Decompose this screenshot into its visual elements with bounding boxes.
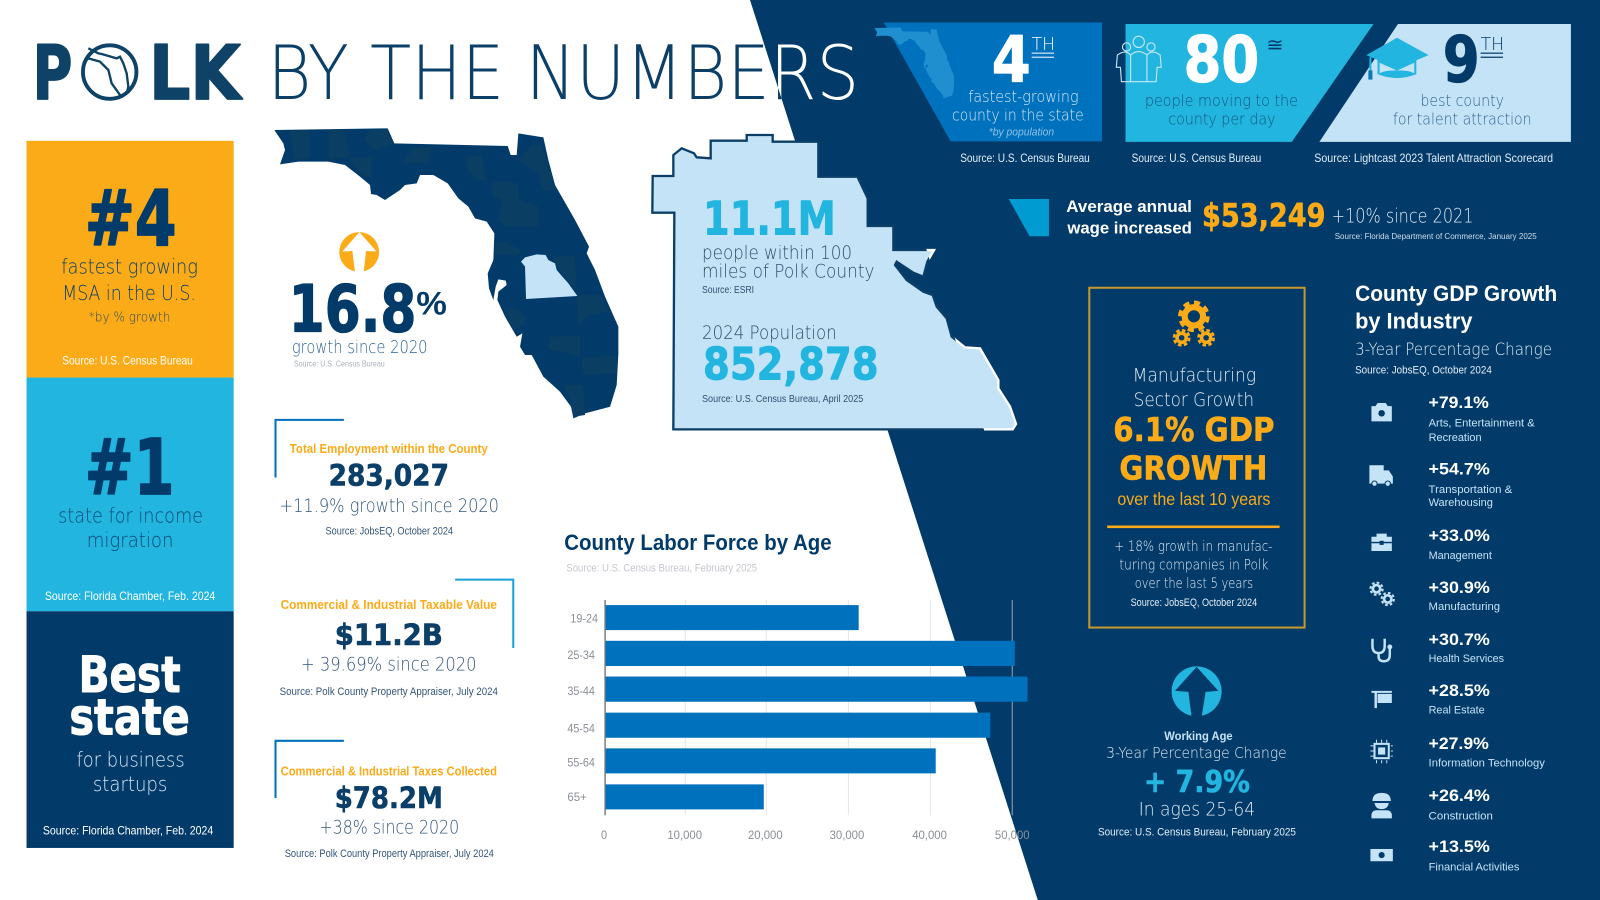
icon: cyan up arrow	[1172, 666, 1222, 717]
heading: county GDP growth by industry: County GDP Growth	[1355, 281, 1557, 306]
row: health services: Health Services	[1429, 653, 1504, 665]
row: real estate: Real Estate	[1429, 704, 1485, 716]
panel: manufacturing sector growth: over the last 10 years	[1117, 489, 1271, 509]
stat: working age change: 3-Year Percentage Change	[1106, 744, 1287, 762]
stat: working age change: + 7.9%	[1144, 765, 1250, 800]
icon: gears	[1174, 303, 1214, 345]
stat: commercial and industrial taxable value: + 39.69% since 2020	[301, 654, 477, 675]
panel: #4 fastest growing MSA: #4	[85, 175, 177, 264]
stat: average annual wage: $53,249	[1202, 199, 1326, 235]
panel: best state for business startups: state	[69, 689, 190, 747]
row: health services	[1372, 631, 1504, 665]
heading: county labor force by age	[564, 530, 832, 574]
icon: people group	[1116, 36, 1161, 82]
title	[33, 30, 859, 117]
stat: commercial and industrial taxes collected: +38% since 2020	[319, 818, 459, 839]
panel: #1 state for income migration: #1	[85, 424, 174, 513]
panel: 80 people moving per day	[1116, 23, 1373, 142]
panel: 4th fastest-growing county: 4	[992, 23, 1031, 97]
panel: Polk County shape: people within 100	[702, 243, 852, 264]
panel: #1 state for income migration	[27, 378, 234, 611]
panel: 9th best county for talent attraction: TH	[1481, 35, 1504, 55]
panel: best state for business startups	[27, 611, 234, 848]
panel: 9th best county for talent attraction: for talent attraction	[1393, 109, 1532, 128]
row: construction: Construction	[1429, 810, 1493, 822]
stat: 16.8% growth since 2020: Source: U.S. Census Bureau	[294, 358, 385, 368]
panel: Polk County shape: 2024 Population	[702, 323, 837, 344]
panel: #1 state for income migration: state for income	[58, 503, 203, 527]
stat: commercial and industrial taxes collected: $78.2M	[335, 781, 443, 815]
panel: #4 fastest growing MSA: fastest growing	[61, 254, 198, 278]
heading: county labor force by age: Source: U.S. Census Bureau, February 2025	[566, 562, 757, 574]
stat: average annual wage: Source: Florida Department of Commerce, January 2025	[1335, 231, 1537, 241]
bar chart: labor force by age: 35-44	[567, 684, 595, 698]
bar chart: labor force by age	[567, 600, 1030, 842]
panel: Polk County shape: Source: ESRI	[702, 285, 754, 296]
panel: 9th best county for talent attraction: best county	[1420, 91, 1504, 110]
icon: graduation cap	[1366, 38, 1429, 80]
panel: manufacturing sector growth: 6.1% GDP	[1113, 411, 1274, 449]
panel: #4 fastest growing MSA: Source: U.S. Census Bureau	[62, 353, 193, 367]
panel: best state for business startups: Source: Florida Chamber, Feb. 2024	[43, 824, 213, 838]
stat: total employment: Source: JobsEQ, October 2024	[326, 526, 453, 538]
title: LK	[149, 30, 243, 117]
row: manufacturing: Manufacturing	[1429, 601, 1500, 613]
stat: total employment: Total Employment within the County	[290, 441, 489, 456]
panel: 4th fastest-growing county: *by population	[989, 127, 1054, 139]
icon: Florida silhouette	[875, 28, 954, 99]
heading: county GDP growth by industry: 3-Year Percentage Change	[1355, 339, 1552, 359]
row: information technology	[1370, 735, 1545, 769]
row: management	[1371, 527, 1493, 562]
bar chart: labor force by age: 45-54	[567, 722, 595, 736]
panel: #1 state for income migration: Source: Florida Chamber, Feb. 2024	[45, 589, 215, 603]
panel: manufacturing sector growth	[1089, 288, 1305, 628]
background: navy diagonal panel	[750, 0, 1600, 900]
bar chart: labor force by age: 65+	[567, 790, 587, 804]
row: financial activities	[1370, 838, 1520, 873]
stat: commercial and industrial taxes collected	[276, 741, 497, 860]
panel: #4 fastest growing MSA: MSA in the U.S.	[62, 281, 196, 305]
panel: manufacturing sector growth: + 18% growth in manufac-	[1114, 539, 1272, 555]
bar chart: labor force by age: 55-64	[567, 755, 595, 769]
bar chart: labor force by age: 20,000	[748, 828, 783, 842]
panel: 9th best county for talent attraction	[1319, 23, 1571, 142]
panel: Polk County shape: miles of Polk County	[702, 262, 874, 283]
bar chart: labor force by age: 50,000	[995, 828, 1030, 842]
row: information technology: Information Technology	[1429, 757, 1545, 769]
panel: manufacturing sector growth: turing companies in Polk	[1119, 557, 1268, 573]
stat: average annual wage: wage increased	[1066, 219, 1192, 238]
icon: orange up arrow	[339, 232, 379, 272]
panel: Polk County shape	[652, 135, 1016, 429]
panel: 80 people moving per day: county per day	[1168, 109, 1276, 128]
panel: manufacturing sector growth: Sector Growth	[1134, 389, 1254, 411]
panel: manufacturing sector growth: GROWTH	[1119, 450, 1267, 488]
panel: #4 fastest growing MSA: *by % growth	[89, 310, 170, 325]
panel: manufacturing sector growth: Manufacturing	[1133, 365, 1256, 387]
row: arts, entertainment and recreation: Recreation	[1429, 432, 1482, 444]
stat: commercial and industrial taxable value: Commercial & Industrial Taxable Value	[281, 597, 497, 612]
panel: manufacturing sector growth: Source: JobsEQ, October 2024	[1131, 597, 1257, 609]
stat: average annual wage: Average annual	[1066, 197, 1192, 216]
row: construction: +26.4%	[1429, 787, 1490, 805]
stat: working age change	[1098, 666, 1296, 839]
panel: 80 people moving per day: people moving to the	[1145, 91, 1298, 110]
sources for top tiles	[960, 152, 1553, 165]
stat: working age change: Source: U.S. Census Bureau, February 2025	[1098, 827, 1296, 839]
row: information technology: +27.9%	[1429, 735, 1489, 753]
stat: average annual wage	[1009, 197, 1537, 241]
bar chart: labor force by age: 10,000	[667, 828, 702, 842]
panel: 80 people moving per day: 80	[1184, 23, 1259, 97]
stat: 16.8% growth since 2020: %	[416, 284, 447, 321]
panel: 4th fastest-growing county	[875, 22, 1102, 141]
list: GDP growth by industry	[1369, 394, 1545, 873]
panel: 80 people moving per day: ≅	[1266, 35, 1284, 56]
stat: 16.8% growth since 2020: 16.8	[289, 272, 416, 348]
panel: Polk County shape: 852,878	[703, 338, 879, 391]
row: arts, entertainment and recreation	[1371, 394, 1535, 444]
heading: county GDP growth by industry: by Industry	[1355, 309, 1473, 334]
row: management: Management	[1429, 550, 1493, 562]
sources for top tiles: Source: U.S. Census Bureau	[1132, 152, 1261, 165]
row: manufacturing: +30.9%	[1429, 579, 1490, 597]
stat: total employment: 283,027	[329, 459, 449, 493]
icon: wage wedge	[1009, 199, 1049, 236]
row: transportation and warehousing: +54.7%	[1429, 460, 1490, 478]
stat: commercial and industrial taxable value: Source: Polk County Property Appraiser, July 2024	[280, 686, 498, 698]
bar chart: labor force by age: 0	[601, 828, 607, 842]
stat: total employment	[276, 420, 499, 538]
sources for top tiles: Source: Lightcast 2023 Talent Attraction Scorecard	[1314, 152, 1553, 165]
row: financial activities: +13.5%	[1429, 838, 1490, 856]
row: arts, entertainment and recreation: +79.1%	[1429, 394, 1489, 412]
row: transportation and warehousing: Warehousing	[1429, 497, 1493, 509]
heading: county GDP growth by industry	[1355, 281, 1557, 376]
map: Florida with Polk County highlighted	[274, 128, 618, 418]
bar chart: labor force by age: 40,000	[912, 828, 947, 842]
row: financial activities: Financial Activities	[1429, 861, 1520, 873]
icon: globe with Florida in title	[83, 45, 136, 99]
sources for top tiles: Source: U.S. Census Bureau	[960, 152, 1090, 165]
stat: commercial and industrial taxable value	[280, 580, 513, 698]
panel: Polk County shape: Source: U.S. Census Bureau, April 2025	[702, 394, 864, 405]
row: management: +33.0%	[1429, 527, 1490, 545]
stat: commercial and industrial taxes collected: Commercial & Industrial Taxes Collected	[281, 764, 497, 779]
panel: best state for business startups: for business	[77, 747, 185, 771]
row: arts, entertainment and recreation: Arts, Entertainment &	[1429, 418, 1535, 430]
panel: #1 state for income migration: migration	[87, 528, 173, 552]
stat: 16.8% growth since 2020: growth since 2020	[292, 337, 428, 358]
row: manufacturing	[1370, 579, 1500, 613]
panel: 9th best county for talent attraction: 9	[1443, 23, 1480, 97]
panel: best state for business startups: startups	[93, 772, 167, 796]
stat: commercial and industrial taxes collected: Source: Polk County Property Appraiser, July 2024	[285, 848, 494, 860]
bar chart: labor force by age: 25-34	[567, 648, 595, 662]
panel: 4th fastest-growing county: county in the state	[952, 105, 1084, 124]
bar chart: labor force by age: 30,000	[830, 828, 864, 842]
title: P	[33, 30, 72, 117]
heading: county labor force by age: County Labor Force by Age	[564, 530, 832, 555]
stat: total employment: +11.9% growth since 2020	[280, 496, 499, 517]
title: BY THE NUMBERS	[267, 30, 859, 117]
stat: commercial and industrial taxable value: $11.2B	[335, 618, 443, 652]
stat: average annual wage: +10% since 2021	[1332, 204, 1473, 227]
row: real estate	[1371, 682, 1490, 716]
panel: 4th fastest-growing county: TH	[1032, 35, 1055, 55]
stat: working age change: Working Age	[1164, 730, 1233, 743]
panel: best state for business startups: Best	[79, 646, 181, 704]
row: transportation and warehousing	[1369, 460, 1513, 509]
bar chart: labor force by age: 19-24	[570, 611, 598, 625]
panel: #4 fastest growing MSA	[27, 141, 234, 378]
row: construction	[1371, 787, 1493, 822]
panel: Polk County shape: 11.1M	[703, 192, 836, 246]
heading: county GDP growth by industry: Source: JobsEQ, October 2024	[1355, 364, 1492, 376]
panel: manufacturing sector growth: over the last 5 years	[1135, 576, 1253, 592]
row: health services: +30.7%	[1429, 631, 1490, 649]
panel: 4th fastest-growing county: fastest-growing	[968, 87, 1079, 106]
row: real estate: +28.5%	[1429, 682, 1490, 700]
row: transportation and warehousing: Transportation &	[1429, 484, 1513, 496]
stat: working age change: In ages 25-64	[1139, 798, 1255, 820]
